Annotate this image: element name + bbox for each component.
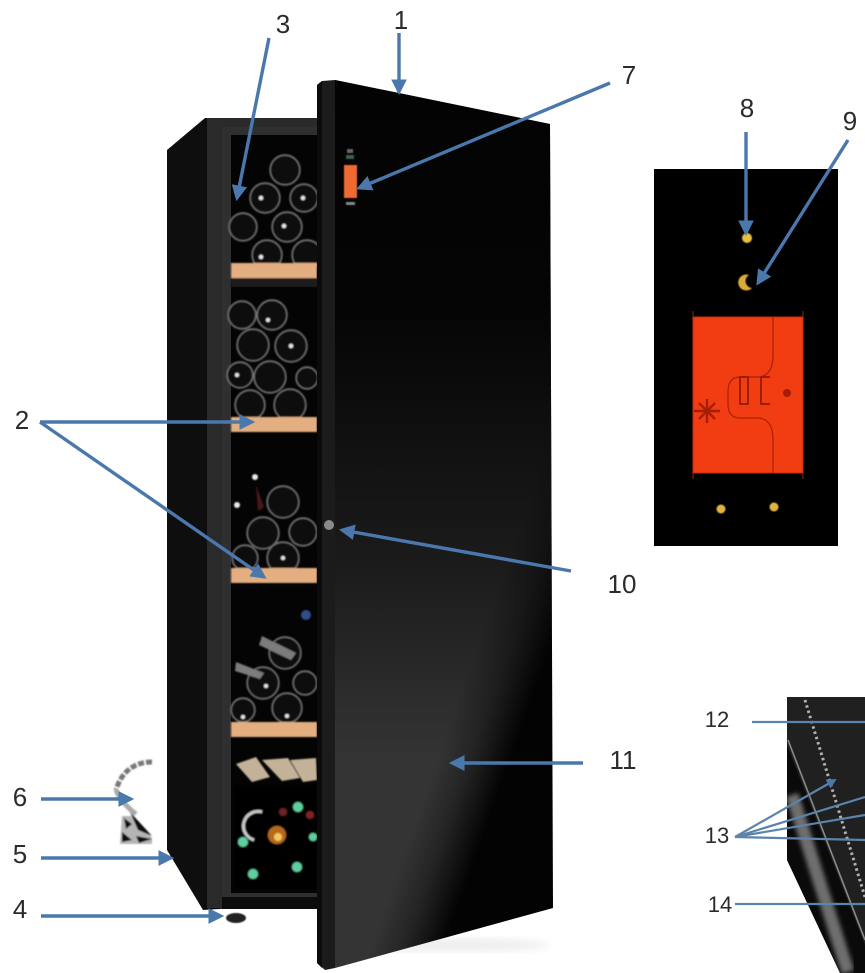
hinge detail photo xyxy=(787,697,865,973)
bottle highlights xyxy=(234,196,305,719)
number labels: 8 xyxy=(740,93,754,123)
door xyxy=(317,80,553,970)
number labels: 9 xyxy=(843,106,857,136)
number labels: 3 xyxy=(276,9,290,39)
number labels: 10 xyxy=(608,569,636,599)
number labels: 7 xyxy=(622,60,636,90)
control panel close-up xyxy=(654,169,838,546)
door control display xyxy=(344,149,357,205)
power cord xyxy=(116,762,152,844)
icon: sun light xyxy=(742,233,752,243)
number labels: 5 xyxy=(13,839,27,869)
cabinet body xyxy=(167,118,320,910)
bottom bottles xyxy=(234,757,318,889)
shelf fronts xyxy=(231,263,317,737)
leveling foot xyxy=(226,913,246,923)
number labels: 12 xyxy=(705,707,729,732)
number labels: 1 xyxy=(394,5,408,35)
number labels: 14 xyxy=(708,892,732,917)
number labels: 11 xyxy=(610,745,636,775)
number labels: 4 xyxy=(13,894,27,924)
LCD screen xyxy=(693,311,803,479)
number labels: 13 xyxy=(705,823,729,848)
number labels: 6 xyxy=(13,782,27,812)
wine shelves and bottles xyxy=(227,155,322,889)
icon: snowflake xyxy=(694,399,720,423)
number labels: 2 xyxy=(15,405,29,435)
door handle xyxy=(324,520,334,530)
icon: moon light xyxy=(738,274,752,290)
bottle ends xyxy=(227,155,322,723)
